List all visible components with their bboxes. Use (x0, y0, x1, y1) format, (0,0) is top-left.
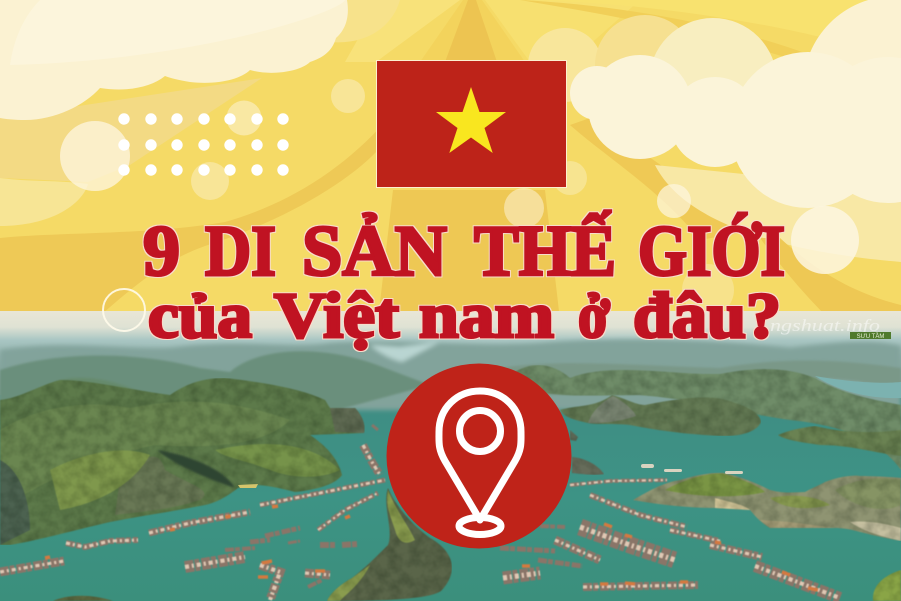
far right pale water (815, 376, 901, 398)
lower right island (633, 473, 901, 541)
floating fishing villages (0, 425, 840, 600)
decorative bokeh circles (60, 79, 859, 316)
pale lower puff (0, 178, 88, 226)
mid hazy ridges (0, 351, 901, 420)
haze and water base (0, 311, 901, 601)
aerial photo of Ha Long Bay (0, 311, 901, 601)
upper right swooshes (510, 0, 901, 60)
yellow sky background (0, 0, 901, 320)
title line 1: DI (205, 211, 276, 291)
raft orange roofs (45, 506, 818, 590)
center bottom island (327, 488, 452, 601)
title line 1: THẾ (474, 210, 616, 291)
raft highlights (0, 445, 840, 600)
clouds: top right (528, 0, 901, 208)
right middle island (560, 395, 761, 436)
title line 2: Việt (274, 280, 399, 352)
right mid mountain (515, 365, 901, 470)
national flag of Vietnam (376, 60, 566, 188)
title line 2: của (148, 280, 252, 352)
title line 2: nam (419, 280, 554, 352)
watermark tag: SƯU TẦM (857, 333, 884, 340)
curved band left (0, 122, 385, 320)
title line 1 (143, 210, 785, 291)
dark cliff shadow (157, 450, 235, 488)
flag star (436, 87, 506, 153)
small islets (570, 430, 604, 475)
title line 1: 9 (143, 211, 180, 291)
raft bases (0, 425, 840, 600)
title line 2: ở (578, 280, 610, 352)
sandy beach (238, 484, 258, 488)
title line 2: đâu? (633, 280, 781, 352)
far right island (778, 426, 901, 456)
clouds: top left (0, 0, 400, 226)
icon: map pin (439, 391, 521, 534)
sun rays centre (378, 190, 560, 320)
white dot grid (118, 113, 289, 176)
watermark: ngshuat.info (770, 316, 880, 335)
soft back puff (330, 0, 400, 42)
tan shadow (0, 78, 262, 182)
location pin badge (386, 364, 572, 548)
watermark (770, 316, 891, 340)
main cream puff (0, 0, 348, 120)
title line 1: SẢN (302, 211, 447, 291)
title line 2 (148, 280, 781, 352)
main left island mass (0, 378, 365, 545)
small boats (641, 464, 743, 474)
white ring accent (103, 289, 145, 331)
distant mountains (0, 339, 901, 410)
corner islets (53, 570, 901, 601)
title line 1: GIỚI (638, 211, 785, 291)
